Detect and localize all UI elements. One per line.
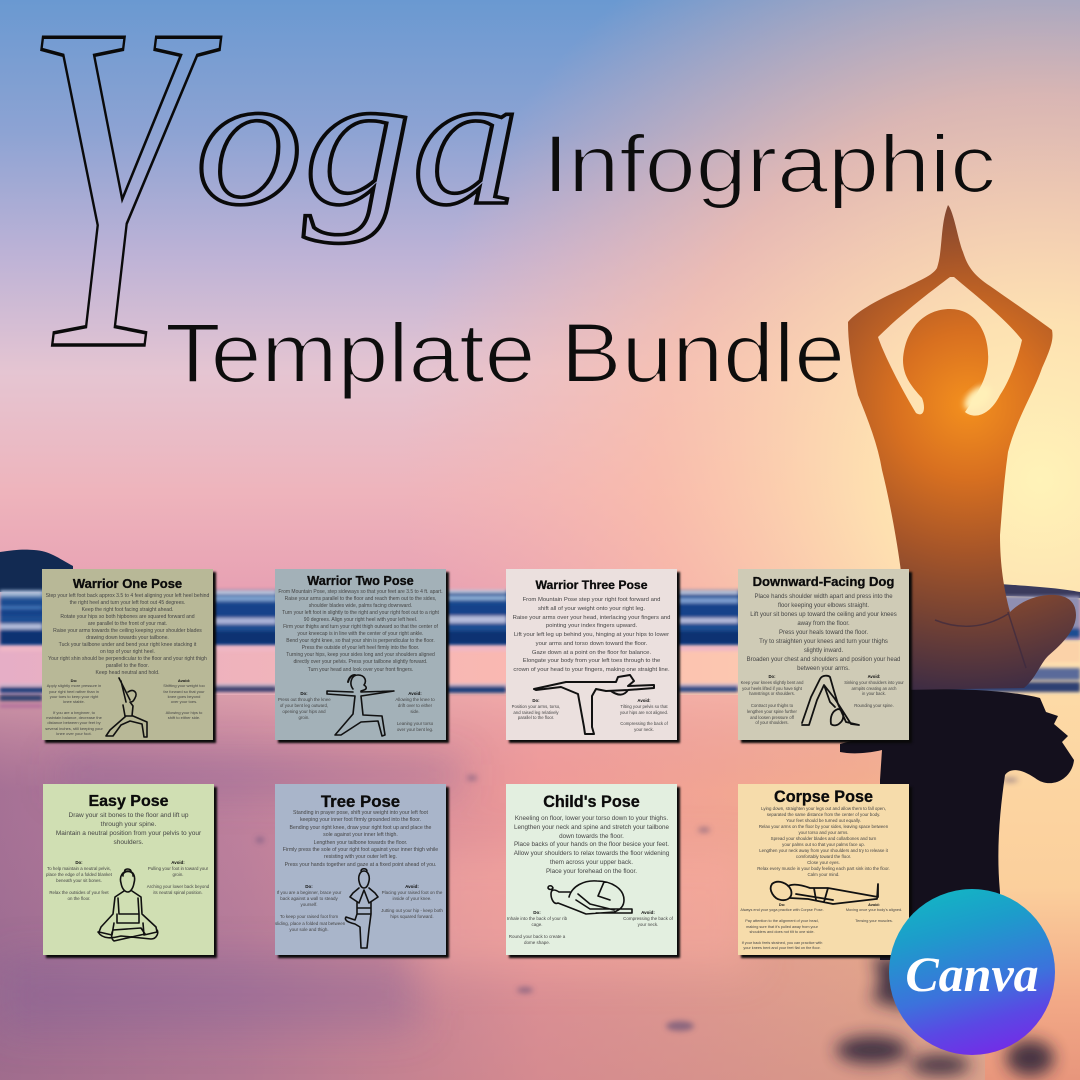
instructions: shift all of your weight onto your right leg. [538,606,645,612]
do column: Keep your knees slightly bent and [741,680,803,685]
icon: warrior one figure [105,677,148,738]
do column: opening your hips and [282,709,326,714]
do column: knee over your foot. [56,731,92,736]
do column: maintain balance, decrease the [46,715,102,720]
instructions: shoulders. [114,839,144,846]
panel: Corpse Pose [738,784,909,955]
instructions: Close your eyes. [807,860,840,865]
icon: warrior two figure [326,674,395,737]
avoid column [146,860,209,895]
badge: Canva logo: Canva [905,946,1039,1002]
avoid column: in your back. [862,691,886,696]
avoid column: knee goes beyond [168,694,200,699]
instructions: Keep head neutral and hold. [95,670,160,676]
instructions [513,597,670,673]
instructions: Elongate your body from your left toes through to the [523,658,660,664]
icon: downward dog figure [801,674,860,726]
avoid column: side. [410,709,420,714]
instructions: through your spine. [101,821,156,828]
avoid column: Avoid: [641,910,655,915]
avoid column: Leaning your torso [397,721,433,726]
panel: Downward-Facing Dog [738,569,909,740]
icon: child's pose figure [547,880,633,915]
do column [507,910,567,945]
do column: and raised leg relatively [513,710,559,715]
do column: Press out through the knee [278,697,331,702]
water ripples and blotches [256,776,1018,1031]
do column: If your back feels strained, you can practice with [742,941,822,945]
instructions: keeping your inner foot firmly grounded into the floor. [300,817,421,823]
instructions: Relax your arms on the floor by your sides, leaving space between [759,824,888,829]
avoid column: Avoid: [405,884,419,889]
icon: easy pose figure [97,868,159,942]
instructions [757,806,890,877]
do column: your right heel rather than in [49,689,99,694]
do column: making sure that it's pulled away from your [746,925,818,929]
avoid column: over your bent leg. [397,727,433,732]
instructions: Bending your right knee, draw your right foot up and place the [290,825,431,831]
instructions: Press your hands together and gaze at a fixed point ahead of you. [285,862,436,868]
instructions: down towards the floor. [559,832,624,840]
title line: Template Bundle: Template Bundle [165,306,845,400]
instructions: Lengthen your neck and spine and stretch your tailbone [514,824,669,831]
do column: your sole and thigh. [289,927,329,932]
instructions [46,592,209,676]
avoid column: groin. [172,872,183,876]
avoid column [163,678,205,720]
instructions: Lengthen your neck away from your shoulders and try to release it [759,848,888,853]
do column: and loosen pressure off [750,715,794,720]
instructions: Tuck your tailbone under and bend your right knee stacking it [59,642,196,648]
panel: Tree Pose [275,784,446,955]
avoid column: Shifting your weight too [163,683,205,688]
avoid column [620,698,668,732]
heading: Warrior Two Pose [307,574,414,588]
instructions: From Mountain Pose, step sideways so that your feet are 3.5 to 4 ft. apart. [278,589,443,595]
instructions [278,589,443,673]
do column: of your shoulders. [755,720,789,725]
do column: knee stable. [63,699,85,704]
instructions: Bend your right knee, so that your shin is perpendicular to the floor. [286,638,435,644]
do column: Apply slightly more pressure in [47,683,101,688]
do column: To keep your raised foot from [280,914,338,919]
do column: Position your arms, torso, [512,704,560,709]
panel: Easy Pose [43,784,214,955]
icon: tree pose figure [344,868,379,949]
do column: shoulders and does not tilt to one side. [749,930,814,934]
instructions: Rotate your hips so both hipbones are squared forward and [60,614,195,620]
instructions: your palms out so that your palms face up. [782,842,865,847]
instructions: Firmly press the sole of your right foot against your inner thigh while [283,847,438,853]
instructions: From Mountain Pose step your right foot forward and [523,597,660,603]
do column: Do: [532,698,540,703]
do column: your toes to keep your right [50,694,98,699]
do column: hamstrings or shoulders. [749,691,795,696]
instructions: the right heel and turn your left foot out 45 degrees. [70,600,185,606]
do column: distance between your feet by [47,720,101,725]
instructions [514,815,669,874]
distant headland [0,550,73,592]
seated yoga silhouette [848,205,1076,690]
heading: Warrior One Pose [73,576,182,591]
instructions: Lift your left leg up behind you, hinging at your hips to lower [514,632,669,638]
avoid column [395,691,435,732]
do column [46,860,112,900]
do column: beneath your sit bones. [56,878,102,882]
instructions: slightly inward. [804,648,843,654]
instructions: Your right shin should be perpendicular to the floor and your right thigh [48,656,207,662]
avoid column: over your toes. [171,699,197,704]
silhouette reflection [836,689,1074,1076]
instructions: parallel to the floor. [106,663,149,669]
avoid column: armpits creating an arch [852,686,896,691]
avoid column: far forward so that your [163,689,205,694]
instructions: between your arms. [797,666,850,672]
instructions: resisting with your outer left leg. [324,854,397,860]
instructions: Place backs of your hands on the floor besice your feet. [514,841,669,848]
avoid column [844,674,904,708]
do column: yourself. [300,902,318,907]
avoid column [623,910,673,927]
instructions: shoulder blades wide, palms facing downward. [309,603,412,609]
avoid column: Avoid: [178,678,190,683]
heading: Child's Pose [543,793,640,811]
avoid column: its neutral spinal position. [153,890,203,894]
instructions: pointing your index fingers upward. [546,623,637,629]
instructions: Lengthen your tailbone towards the floor. [314,840,407,846]
do column [275,884,345,932]
do column: of your bent leg outward, [280,703,328,708]
instructions: Firm your thighs and turn your right thigh outward so that the center of [283,624,438,630]
do column: Round your back to create a [509,934,565,939]
do column: Do: [71,678,77,683]
panel: Warrior Two Pose [275,569,446,740]
instructions: Maintain a neutral position from your pelvis to your [56,830,201,837]
panel: Warrior One Pose [42,569,213,740]
do column: Do: [533,910,541,915]
instructions: Press the outside of your left heel firmly into the floor. [302,645,419,651]
instructions: Place your forehead on the floor. [546,868,637,874]
avoid column: Compressing the back of [623,916,673,921]
avoid column: your neck. [634,727,654,732]
do column: To help maintain a neutral pelvis, [47,866,111,870]
avoid column: Allowing the knee to [395,697,435,702]
heading: Warrior Three Pose [536,578,647,592]
avoid column: Placing your raised foot on the [382,890,442,895]
do column: If you are a beginner, to [53,710,95,715]
avoid column: shift to either side. [168,715,200,720]
instructions: your torso and your arms. [798,830,849,835]
do column: dome shape. [524,940,550,945]
instructions: Spread your shoulder blades and collarbones and turn [771,836,876,841]
instructions: are parallel to the front of your mat. [88,621,167,627]
do column: Do: [300,691,308,696]
instructions: comfortably toward the floor. [796,854,851,859]
instructions: Place hands shoulder width apart and press into the [754,594,893,600]
icon: corpse pose figure [770,880,879,905]
instructions: Lying down, straighten your legs out and allow them to fall open, [761,806,886,811]
do column: parallel to the floor. [518,715,554,720]
avoid column [381,884,443,919]
heading: Tree Pose [321,792,400,811]
instructions: Turn your left foot in slightly to the right and your right foot out to a right [282,610,439,616]
avoid column: drift over to either [398,703,432,708]
instructions: Raise your arms over your head, interlacing your fingers and [513,614,670,620]
avoid column: hips squared forward. [390,914,434,919]
do column [740,674,804,725]
avoid column: Avoid: [171,860,185,864]
instructions: Kneeling on floor, lower your torso down to your thighs. [515,815,668,822]
do column: Relax the outsides of your feet [49,890,109,894]
do column: your heels lifted if you have tight [742,686,802,691]
title word: Infographic: Infographic [543,119,996,210]
instructions: your arms and torso down toward the floor. [536,641,647,647]
instructions: drawing down towards your tailbone. [86,635,169,641]
do column: Always end your yoga practice with Corpse Pose. [740,908,824,912]
avoid column: Rounding your spine. [854,703,894,708]
avoid column: Tensing your muscles. [855,919,893,923]
avoid column: Sinking your shoulders into your [844,680,904,685]
heading: Downward-Facing Dog [753,574,894,589]
do column: lengthen your spine further [747,709,797,714]
instructions: Step your left foot back approx 3.5 to 4 feet aligning your left heel behind [46,592,209,598]
instructions: Turn your head and look over your front fingers. [308,667,413,673]
avoid column: Moving once your body's aligned. [846,908,902,912]
instructions: directly over your pelvis. Press your tailbone slightly forward. [294,659,427,665]
do column: sliding, place a folded mat between [275,921,345,926]
avoid column: Arching your lower back beyond [147,884,209,888]
instructions: 90 degrees. Align your right heel with your left heel. [304,617,417,623]
do column: cage. [531,922,542,927]
instructions: Press your heals toward the floor. [779,630,868,636]
avoid column: Allowing your hips to [166,710,202,715]
do column: groin. [298,715,309,720]
avoid column: Compressing the back of [620,721,668,726]
do column: several inches, still keeping your [45,726,103,731]
instructions: Broaden your chest and shoulders and position your head [747,657,900,663]
heading: Easy Pose [88,793,169,810]
instructions: crown of your head to your fingers, making one straight line. [513,667,670,673]
do column: back against a wall to steady [280,896,338,901]
instructions: Keep the right foot facing straight ahead. [82,607,173,613]
instructions: Draw your sit bones to the floor and lift up [69,812,188,819]
instructions: Raise your arms towards the ceiling keeping your shoulder blades [53,628,202,634]
instructions: them across your upper back. [550,859,633,866]
instructions: Standing in prayer pose, shift your weight into your left foot [293,810,428,816]
instructions: on top of your right heel. [100,649,155,655]
avoid column: your hips are not aligned. [620,710,668,715]
instructions: Turning your hips, keep your sides long and your shoulders aligned [286,652,435,658]
do column: Do: [779,903,785,907]
instructions: Lift your sit bones up toward the ceiling and your knees [750,612,897,618]
icon: warrior three figure [533,674,655,735]
instructions: floor keeping your elbows straight. [778,603,869,609]
instructions: Try to straighten your knees and turn your thighs [759,639,888,645]
panel: Warrior Three Pose [506,569,677,740]
do column: Do: [768,674,775,679]
instructions: separated the same distance from the center of your body. [767,812,880,817]
instructions: Relax every muscle in your body feeling each part sink into the floor. [757,866,890,871]
do column: Inhale into the back of your rib [507,916,567,921]
panel: Child's Pose [506,784,677,955]
avoid column: Pulling your foot in toward your [148,866,208,870]
sea waves [0,590,1080,662]
do column: Contract your thighs to [751,703,793,708]
do column: Do: [305,884,313,889]
avoid column: Avoid: [868,903,880,907]
avoid column [846,903,902,923]
do column: place the edge of a folded blanket [46,872,112,876]
do column: on the floor. [68,896,90,900]
instructions: Allow your shoulders to relax towards the floor widening [514,850,669,857]
heading: Corpse Pose [774,788,873,806]
do column [278,691,331,720]
instructions: Calm your mind. [808,872,839,877]
do column: Do: [75,860,83,864]
do column [740,903,824,950]
do column: your knees bent and your feet flat on the floor. [743,946,821,950]
instructions [747,594,900,672]
instructions: Raise your arms parallel to the floor and reach them out to the sides, [285,596,436,602]
avoid column: Avoid: [868,674,880,679]
title word: Yoga: oga [195,35,520,245]
instructions [56,812,202,846]
instructions: sole against your inner left thigh. [323,832,398,838]
do column: Pay attention to the alignment of your head, [745,919,819,923]
avoid column: your neck. [638,922,658,927]
badge: Canva logo [889,889,1055,1055]
instructions: Gaze down at a point on the floor for balance. [532,650,651,656]
avoid column: Avoid: [637,698,651,703]
do column: If you are a beginner, brace your [277,890,341,895]
do column [512,698,560,720]
instructions: Your feet should be turned out equally. [786,818,861,823]
avoid column: inside of your knee. [392,896,432,901]
instructions [283,810,438,868]
avoid column: Avoid: [408,691,422,696]
instructions: your kneecap is in line with the center of your right ankle. [298,631,423,637]
avoid column: Jutting out your hip - keep both [381,908,443,913]
do column [45,678,103,736]
avoid column: Tilting your pelvis so that [620,704,668,709]
instructions: away from the floor. [797,621,850,627]
